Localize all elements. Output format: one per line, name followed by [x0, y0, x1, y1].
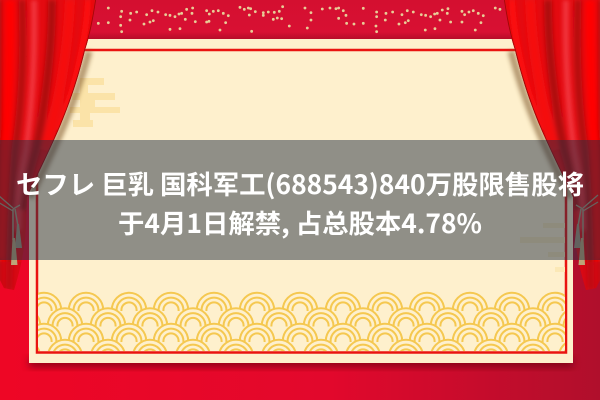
- headline: 于4月1日解禁, 占总股本4.78%: [118, 202, 482, 241]
- cloud decoration right: [520, 223, 565, 272]
- cloud decoration left: [70, 78, 120, 127]
- left tassel: [0, 195, 22, 265]
- headline: [16, 163, 584, 241]
- grey text band: [0, 140, 600, 260]
- right curtain: [500, 0, 600, 295]
- red inner border: [37, 50, 566, 352]
- wave pattern: [38, 292, 565, 351]
- frame shadow: [29, 358, 573, 367]
- left curtain: [0, 0, 100, 295]
- headline: セフレ 巨乳 国科军工(688543)840万股限售股将: [16, 163, 584, 202]
- gold confetti: [98, 7, 500, 32]
- cream frame panel: [29, 39, 573, 363]
- top red strip: [0, 0, 600, 40]
- right tassel: [574, 195, 598, 265]
